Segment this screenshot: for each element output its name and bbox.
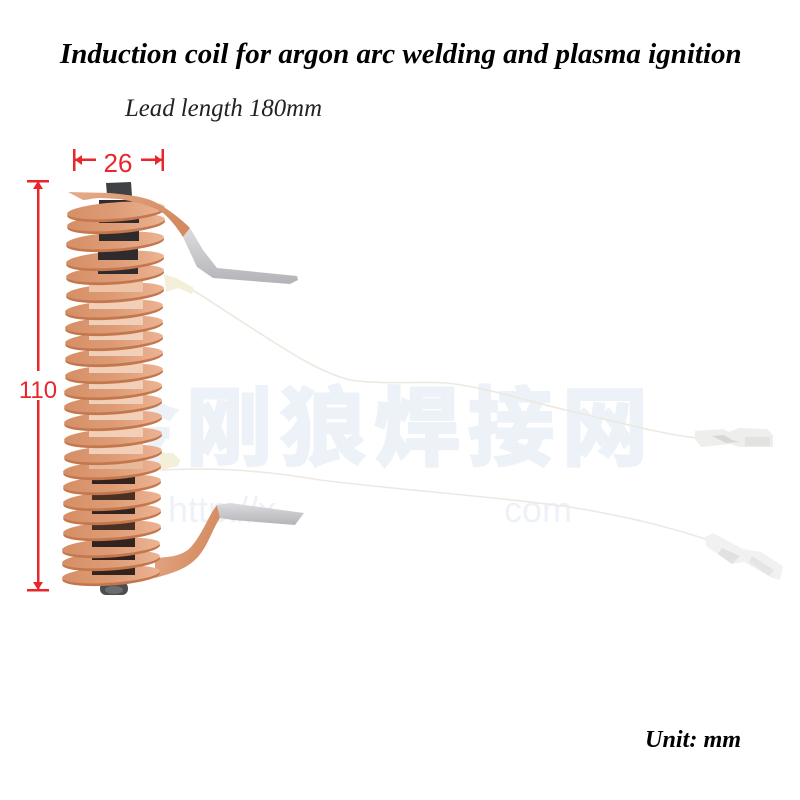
lead length note: Lead length 180mm: [124, 95, 322, 122]
top terminal strip: [68, 192, 298, 284]
height dimension: 110: [19, 180, 57, 592]
terminal: lower: [705, 533, 783, 580]
terminal: upper: [695, 428, 773, 447]
top core pin: [106, 182, 132, 199]
width dimension: 26: 26: [104, 148, 132, 178]
lead wire: lower: [160, 469, 708, 540]
unit note: Unit: mm: [645, 726, 741, 753]
watermark: 金刚狼焊接网: [92, 381, 656, 477]
watermark: com: [504, 489, 572, 530]
bottom terminal strip: [155, 503, 304, 578]
coil insulator tabs: [160, 274, 194, 470]
lead wire: upper: [166, 278, 697, 438]
watermark: http://x: [168, 489, 276, 530]
height dimension: 110: 110: [19, 377, 57, 404]
bottom core pin: [100, 582, 128, 595]
title: Induction coil for argon arc welding and plasma ignition: [59, 38, 742, 70]
width dimension: 26: [73, 148, 164, 178]
copper coil with core: [62, 199, 166, 589]
watermark: [92, 381, 656, 530]
